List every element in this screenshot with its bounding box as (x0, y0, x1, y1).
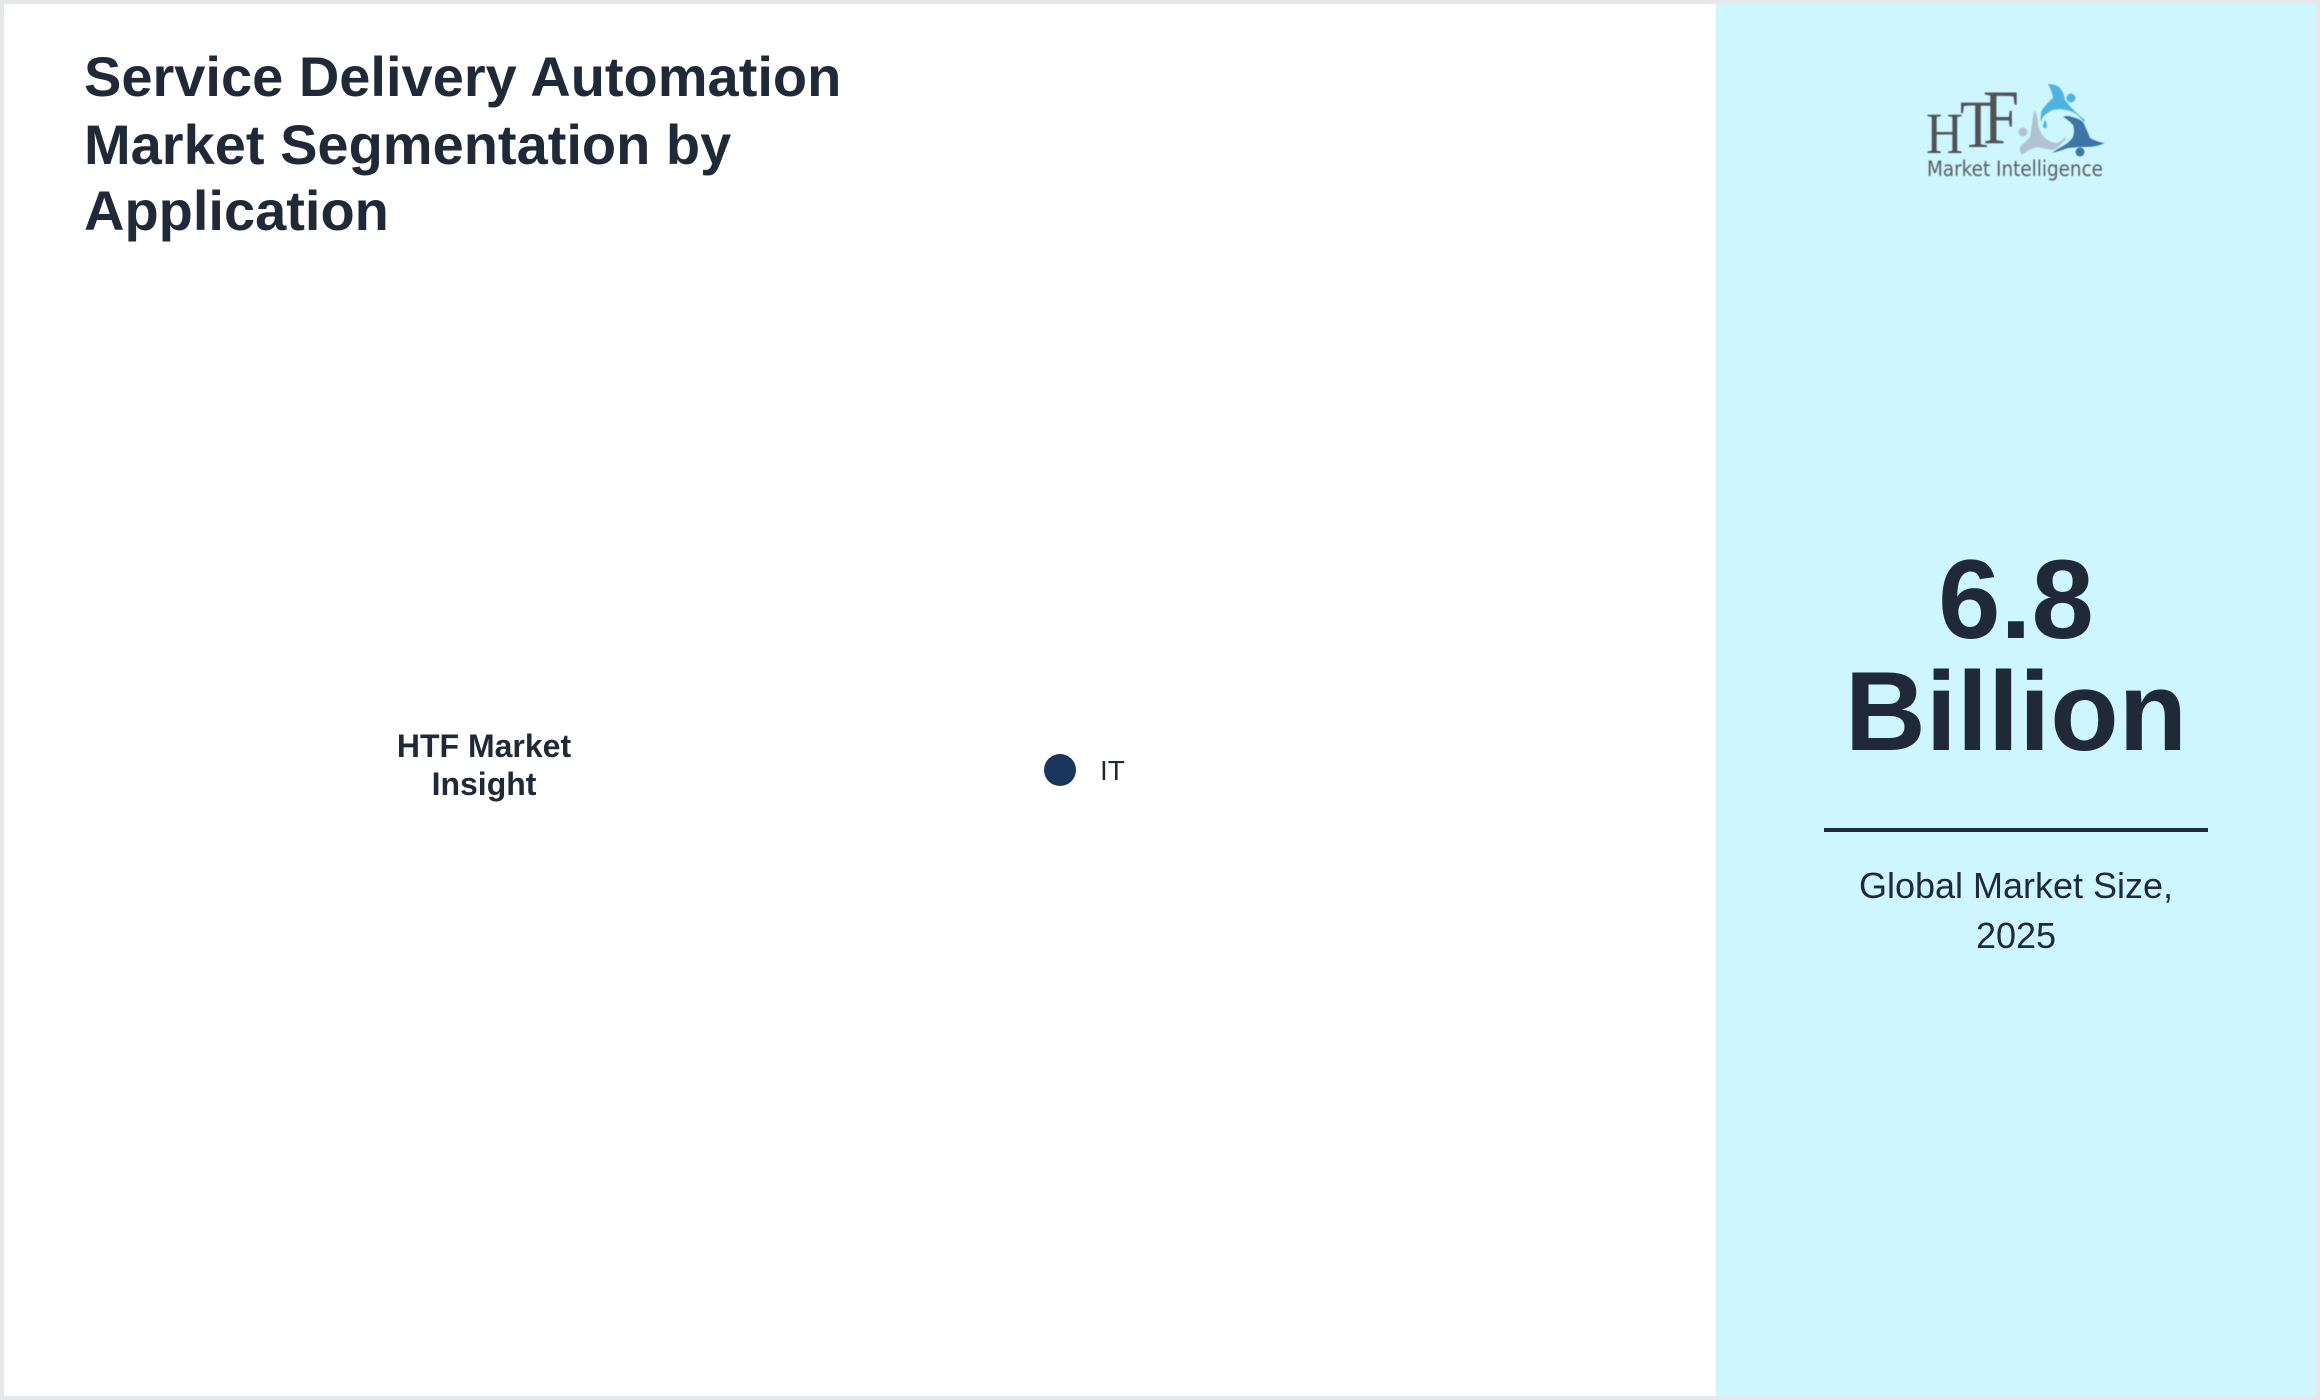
chart center label: HTF Market (397, 728, 571, 764)
market size caption: Global Market Size, (1859, 865, 2173, 906)
logo letters HTF: T (1960, 86, 1996, 162)
logo figure: light blue (2041, 84, 2085, 128)
title (84, 45, 841, 242)
legend item: IT (1044, 754, 1125, 786)
title: Market Segmentation by (84, 113, 731, 176)
panel: market size sidebar (1716, 4, 2316, 1396)
logo figure: grey blue (2018, 110, 2066, 155)
title: Service Delivery Automation (84, 45, 841, 108)
chart center label: Insight (432, 766, 536, 802)
big number (1845, 537, 2187, 774)
big number: Billion (1845, 649, 2187, 774)
title: Application (84, 179, 389, 242)
chart center label (397, 728, 571, 802)
market size caption (1859, 865, 2173, 956)
logo letters HTF (1926, 74, 2019, 166)
legend marker (1044, 754, 1076, 786)
divider rule (1824, 828, 2208, 832)
icon: HTF Market Intelligence logo (1926, 80, 2105, 182)
big number: 6.8 (1938, 537, 2094, 662)
logo figure: dark blue (2052, 116, 2105, 156)
logo letters HTF: H (1926, 101, 1963, 166)
market size caption: 2025 (1976, 915, 2056, 956)
legend text: IT (1100, 755, 1125, 786)
